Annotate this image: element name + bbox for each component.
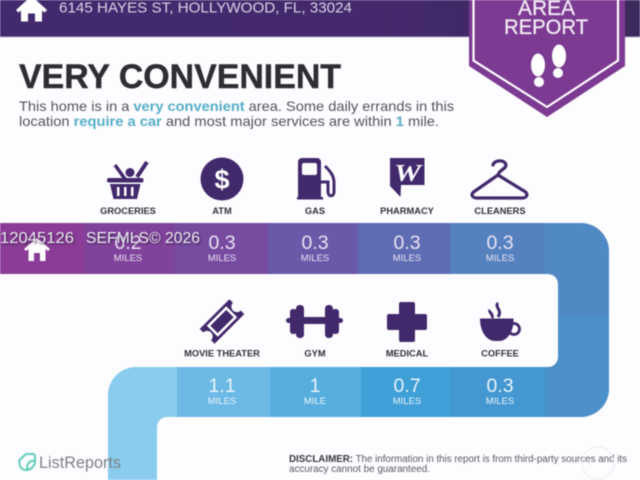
icon: coffee cup [480,303,520,341]
gym distance [304,375,326,407]
category labels: GAS [305,206,325,216]
badge: area report [469,0,625,117]
medical distance: 0.7 [393,375,421,397]
logo: ListReports: ListReports [39,454,121,472]
intro text: location require a car and most major services are within 1 mile. [19,113,439,129]
groceries distance: MILES [114,253,142,264]
category labels: CLEANERS [474,206,526,216]
gym distance: MILE [304,396,326,407]
pharmacy distance: MILES [393,253,421,264]
category labels: COFFEE [481,348,519,358]
category labels: ATM [212,206,232,216]
icon: gas pump [297,158,334,200]
category labels: GYM [304,348,326,358]
category labels: PHARMACY [380,206,435,216]
watermark: 12045126 [0,230,74,247]
coffee distance: MILES [486,396,514,407]
badge title [504,0,588,39]
cleaners distance: 0.3 [486,232,514,254]
badge title: REPORT [504,15,588,39]
icon: pharmacy W [390,158,424,197]
category labels: MEDICAL [386,348,428,358]
coffee distance: 0.3 [486,375,514,397]
icon: groceries basket [107,162,147,199]
cleaners distance [486,232,514,264]
top row distances [114,232,514,264]
gas distance: MILES [301,253,329,264]
watermark: SEFMLS© 2026 [86,230,200,247]
header bar [0,0,640,38]
gym distance: 1 [310,375,320,397]
gas distance [301,232,329,264]
distance ribbon [0,223,609,480]
cleaners distance: MILES [486,253,514,264]
category labels: GROCERIES [100,206,156,216]
medical distance: MILES [393,396,421,407]
medical distance [393,375,421,407]
bottom row distances [208,375,514,407]
intro text [19,98,454,129]
address: 6145 HAYES ST, HOLLYWOOD, FL, 33024 [59,0,352,16]
icon: clothes hanger [472,161,527,198]
disclaimer: accuracy cannot be guaranteed. [289,464,430,475]
groceries distance [114,232,142,264]
groceries distance: 0.2 [114,232,142,254]
icon: footprints [531,44,566,87]
atm distance: 0.3 [208,232,236,254]
icon: header home [16,0,47,22]
atm distance [208,232,236,264]
icon: medical cross [387,302,427,342]
icon: atm dollar: $ [214,164,230,194]
pharmacy distance: 0.3 [393,232,421,254]
disclaimer: DISCLAIMER: The information in this report is from third-party sources and its [289,454,627,465]
icon: ribbon home [24,238,50,261]
movie theater distance: MILES [208,396,236,407]
pharmacy distance [393,232,421,264]
gas distance: 0.3 [301,232,329,254]
video watermark ring [582,447,614,479]
coffee distance [486,375,514,407]
category labels: MOVIE THEATER [184,348,260,358]
heading: VERY CONVENIENT [19,58,341,96]
icon: pharmacy W: W [394,161,423,187]
icon: gym dumbbell [286,305,343,338]
category labels [100,206,526,358]
icon: movie ticket [200,299,244,344]
disclaimer [289,454,627,475]
movie theater distance [208,375,236,407]
icon: atm dollar [200,158,244,200]
watermark [0,230,200,247]
movie theater distance: 1.1 [208,375,236,397]
intro text: This home is in a very convenient area. Some daily errands in this [19,98,454,114]
atm distance: MILES [208,253,236,264]
